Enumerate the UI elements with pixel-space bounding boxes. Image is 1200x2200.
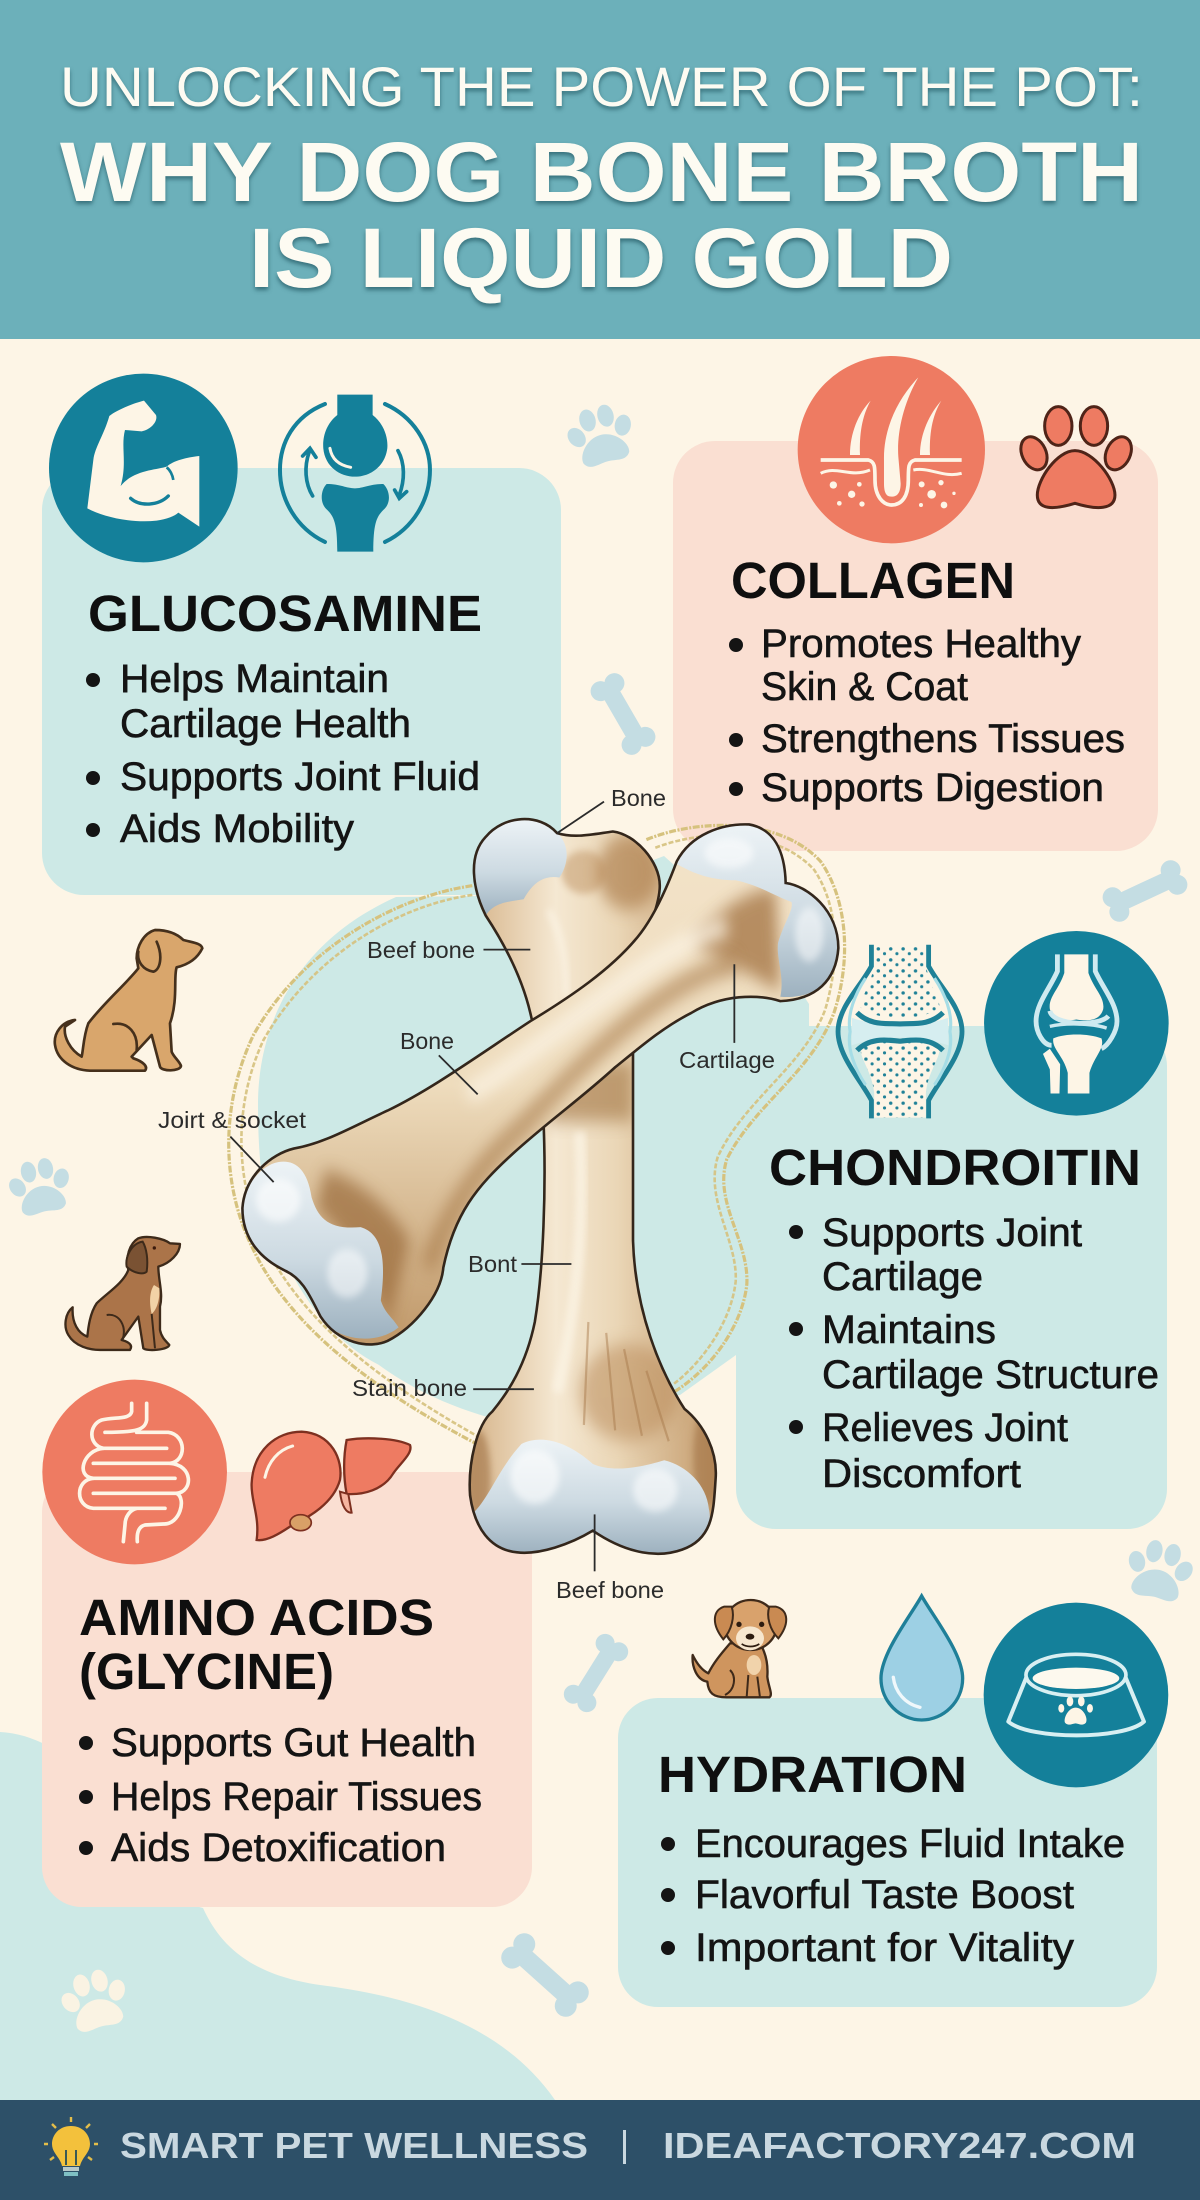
glucosamine heading: GLUCOSAMINE (88, 585, 482, 642)
decorative bone lower (560, 1630, 632, 1716)
icon: joint (280, 395, 430, 552)
panel: hydration (618, 1596, 1168, 2007)
hydration bullet list (661, 1822, 1125, 1970)
glucosamine bullet list: Aids Mobility (120, 807, 354, 851)
amino acids bullet list: Aids Detoxification (111, 1826, 446, 1870)
icon: puppy (693, 1600, 786, 1697)
chondroitin card (736, 1026, 1167, 1529)
footer divider (623, 2130, 626, 2164)
collagen bullet list: Skin & Coat (761, 665, 968, 709)
chondroitin bullet list: Relieves Joint (822, 1406, 1068, 1450)
header banner (0, 0, 1200, 339)
footer website text: IDEAFACTORY247.COM (663, 2125, 1136, 2166)
collagen bullet list: Strengthens Tissues (761, 717, 1125, 761)
bottom left background blob (0, 1732, 555, 2100)
glucosamine bullet list (86, 657, 480, 851)
chondroitin bullet list: Cartilage (822, 1255, 983, 1299)
icon: liver (252, 1432, 410, 1540)
icon: knee joint (984, 931, 1169, 1116)
chondroitin bullet list: Supports Joint (822, 1211, 1082, 1255)
icon: water drop (881, 1596, 963, 1720)
icon: dog bowl (984, 1603, 1168, 1787)
hydration heading: HYDRATION (658, 1746, 967, 1803)
decorative paw left (2, 1153, 78, 1219)
central crossed bones illustration (230, 802, 838, 1571)
diagonal bone left cap (242, 1162, 399, 1339)
amino acids bullet list: Supports Gut Health (111, 1721, 476, 1765)
glucosamine bullet list: Cartilage Health (120, 702, 411, 746)
decorative bone upper (587, 669, 659, 759)
chondroitin bullet list: Discomfort (822, 1452, 1021, 1496)
glucosamine bullet list: Supports Joint Fluid (120, 755, 480, 799)
panel: glucosamine (42, 374, 561, 895)
amino acids card (42, 1472, 532, 1907)
label: bont: Bont (468, 1251, 518, 1277)
label: joint and socket: Joirt & socket (158, 1107, 307, 1133)
chondroitin bullet list: Maintains (822, 1308, 996, 1352)
amino acids heading (79, 1589, 434, 1700)
collagen heading: COLLAGEN (731, 552, 1015, 609)
vertical bone top cap (474, 819, 567, 916)
icon: cartilage cross-section (838, 945, 962, 1118)
diagonal bone right cap (677, 824, 838, 997)
hydration bullet list: Flavorful Taste Boost (695, 1873, 1074, 1917)
label: bone middle: Bone (400, 1028, 454, 1054)
bone labels (158, 785, 775, 1603)
collagen bullet list (729, 622, 1125, 810)
glucosamine bullet list: Helps Maintain (120, 657, 389, 701)
icon: light bulb (44, 2117, 98, 2176)
collagen bullet list: Supports Digestion (761, 766, 1104, 810)
panel: collagen (673, 356, 1158, 851)
title line 1: UNLOCKING THE POWER OF THE POT: (60, 55, 1143, 118)
hydration bullet list: Encourages Fluid Intake (695, 1822, 1125, 1866)
glucosamine card (42, 468, 561, 895)
label: beef bone upper: Beef bone (367, 937, 475, 963)
label: cartilage: Cartilage (679, 1047, 775, 1073)
decorative paw right (1119, 1535, 1200, 1605)
label: beef bone lower: Beef bone (556, 1577, 664, 1603)
amino acids bullet list: Helps Repair Tissues (111, 1775, 482, 1819)
decorative white paw (53, 1963, 137, 2037)
hydration bullet list: Important for Vitality (695, 1926, 1074, 1970)
vertical bone (467, 819, 720, 1554)
title line 3: IS LIQUID GOLD (249, 211, 953, 305)
chondroitin heading: CHONDROITIN (769, 1139, 1141, 1196)
collagen card (673, 441, 1158, 851)
footer brand text: SMART PET WELLNESS (120, 2125, 588, 2166)
vertical bone bottom cap (475, 1440, 710, 1554)
collagen bullet list: Promotes Healthy (761, 622, 1081, 666)
amino acids heading: (GLYCINE) (79, 1643, 334, 1700)
leader lines (230, 802, 734, 1571)
title line 2: WHY DOG BONE BROTH (60, 125, 1143, 219)
label: stain bone: Stain bone (352, 1375, 467, 1401)
label: bone top: Bone (611, 785, 666, 811)
icon: muscle (49, 374, 238, 562)
diagonal bone (242, 824, 838, 1344)
icon: skin and hair (798, 356, 985, 543)
gold decorative rings (229, 825, 845, 1444)
central teal blob (258, 856, 809, 1425)
decorative bone right (1099, 857, 1191, 925)
icon: tan sitting dog (55, 930, 202, 1071)
amino acids bullet list (79, 1721, 482, 1870)
icon: intestine (42, 1380, 227, 1564)
chondroitin bullet list: Cartilage Structure (822, 1353, 1159, 1397)
hydration card (618, 1698, 1157, 2007)
amino acids heading: AMINO ACIDS (79, 1589, 434, 1646)
footer background (0, 2100, 1200, 2200)
icon: brown sitting dog (65, 1237, 180, 1350)
chondroitin bullet list (789, 1211, 1159, 1496)
footer bar (0, 2100, 1200, 2200)
panel: chondroitin (736, 931, 1169, 1529)
header background (0, 0, 1200, 339)
decorative paw top (559, 398, 643, 472)
icon: coral paw (1016, 407, 1136, 508)
decorative bone bottom (497, 1929, 593, 2021)
panel: amino acids (42, 1380, 532, 1907)
